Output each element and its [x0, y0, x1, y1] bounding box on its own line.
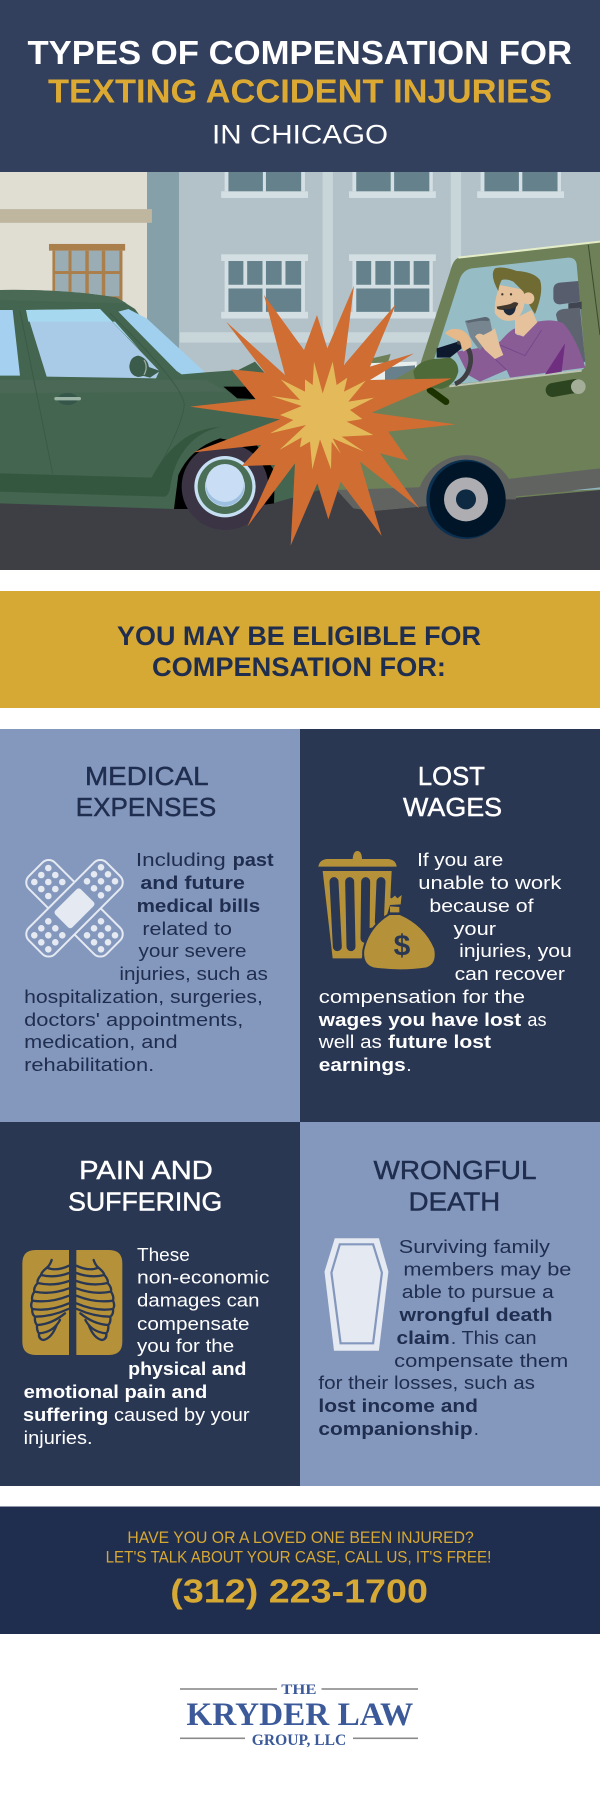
panel: lost wages: [300, 729, 600, 1122]
body text: lost wages: earnings: [319, 1054, 406, 1075]
body text: medical expenses: related to: [142, 918, 232, 939]
body text: pain and suffering: [23, 1244, 269, 1448]
body text: wrongful death: able to pursue a: [402, 1281, 555, 1302]
title line 1: TYPES OF COMPENSATION FOR: [28, 34, 572, 71]
body text: wrongful death: [318, 1236, 571, 1439]
body text: lost wages: injuries, you: [459, 940, 572, 961]
body text: pain and suffering: damages can: [137, 1290, 260, 1311]
body text: lost wages: your: [454, 918, 496, 939]
icon: rib cage: [22, 1250, 122, 1355]
heading: lost wages: WAGES: [403, 792, 502, 822]
call to action text: [106, 1529, 491, 1566]
body text: pain and suffering: caused by your: [114, 1404, 250, 1425]
heading: wrongful death: DEATH: [409, 1187, 500, 1217]
body text: lost wages: If you are: [417, 849, 503, 870]
body text: lost wages: .: [406, 1054, 412, 1075]
body text: wrongful death: .: [474, 1418, 479, 1439]
panel: pain and suffering: [0, 1122, 300, 1486]
logo: The Kryder Law Group, LLC: THE: [281, 1682, 316, 1698]
body text: pain and suffering: suffering: [23, 1404, 108, 1425]
body text: pain and suffering: compensate: [137, 1313, 250, 1334]
heading: lost wages: LOST: [418, 761, 485, 791]
body text: lost wages: unable to work: [418, 872, 562, 893]
body text: medical expenses: medication, and: [24, 1031, 178, 1052]
body text: pain and suffering: non-economic: [137, 1266, 269, 1288]
body text: medical expenses: medical bills: [137, 895, 260, 916]
body text: medical expenses: [24, 849, 274, 1075]
heading: medical expenses: EXPENSES: [76, 792, 216, 822]
banner heading: [117, 621, 481, 682]
body text: medical expenses: and future: [140, 872, 245, 893]
phone number: (312) 223-1700: [170, 1573, 428, 1610]
body text: pain and suffering: emotional pain and: [24, 1381, 207, 1402]
header panel: [0, 0, 600, 172]
body text: pain and suffering: you for the: [137, 1335, 234, 1356]
body text: lost wages: can recover: [455, 963, 565, 984]
logo: The Kryder Law Group, LLC: [180, 1682, 418, 1749]
body text: wrongful death: for their losses, such as: [318, 1372, 535, 1393]
body text: medical expenses: Including: [136, 849, 226, 870]
body text: medical expenses: injuries, such as: [119, 963, 268, 984]
banner heading: YOU MAY BE ELIGIBLE FOR: [117, 621, 481, 651]
body text: wrongful death: compensate them: [394, 1350, 568, 1371]
body text: lost wages: as: [527, 1009, 546, 1030]
seat: [553, 281, 585, 368]
body text: wrongful death: claim: [396, 1327, 450, 1348]
body text: wrongful death: companionship: [318, 1418, 473, 1439]
icon: coffin: [324, 1238, 388, 1351]
body text: lost wages: compensation for the: [319, 986, 525, 1007]
heading: medical expenses: MEDICAL: [85, 761, 209, 791]
logo: The Kryder Law Group, LLC: KRYDER LAW: [186, 1697, 413, 1733]
body text: pain and suffering: physical and: [128, 1358, 246, 1379]
illustration: car crash: [0, 172, 600, 570]
panel: wrongful death: [300, 1122, 600, 1486]
body text: wrongful death: members may be: [403, 1258, 571, 1280]
title line 2: TEXTING ACCIDENT INJURIES: [48, 73, 552, 110]
body text: lost wages: because of: [429, 895, 534, 916]
dollar sign: $: [394, 930, 411, 963]
body text: medical expenses: rehabilitation.: [24, 1054, 154, 1075]
body text: medical expenses: your severe: [138, 940, 246, 961]
body text: pain and suffering: These: [137, 1244, 190, 1265]
driver: [457, 267, 585, 382]
left green car: [0, 290, 320, 530]
body text: lost wages: future lost: [388, 1031, 491, 1052]
body text: medical expenses: hospitalization, surgeries,: [24, 986, 263, 1007]
heading: wrongful death: [374, 1155, 536, 1217]
body text: wrongful death: . This can: [451, 1327, 536, 1348]
banner heading: COMPENSATION FOR:: [152, 652, 446, 682]
buildings background: [0, 172, 600, 375]
bumper strip and wheel: [337, 455, 600, 539]
title line 3: IN CHICAGO: [212, 120, 388, 150]
call to action text: HAVE YOU OR A LOVED ONE BEEN INJURED?: [127, 1529, 474, 1547]
body text: medical expenses: doctors' appointments,: [24, 1009, 243, 1030]
gold banner: [0, 591, 600, 708]
call to action text: LET'S TALK ABOUT YOUR CASE, CALL US, IT'S FREE!: [106, 1548, 491, 1566]
logo: The Kryder Law Group, LLC: GROUP, LLC: [252, 1732, 346, 1749]
side mirror: [413, 358, 458, 402]
heading: pain and suffering: PAIN AND: [79, 1155, 213, 1185]
behind-hood details: [343, 354, 417, 385]
panel: medical expenses: [0, 729, 300, 1122]
road: [0, 488, 600, 570]
door handle: [553, 379, 586, 394]
icon: bandages: [23, 856, 126, 960]
explosion: [190, 286, 456, 546]
icon: trash can and money bag: [318, 851, 436, 970]
heading: lost wages: [403, 761, 502, 822]
body text: medical expenses: past: [233, 849, 274, 870]
body text: pain and suffering: injuries.: [24, 1427, 93, 1448]
body text: lost wages: wages you have lost: [318, 1009, 521, 1030]
body text: wrongful death: Surviving family: [399, 1236, 551, 1257]
steering wheel: [437, 329, 472, 384]
body text: wrongful death: lost income and: [318, 1395, 478, 1416]
heading: pain and suffering: [68, 1155, 222, 1217]
right olive car: [337, 241, 600, 539]
heading: wrongful death: WRONGFUL: [374, 1155, 536, 1185]
body text: lost wages: [318, 849, 572, 1075]
heading: medical expenses: [76, 761, 216, 822]
body text: lost wages: well as: [318, 1031, 382, 1052]
heading: pain and suffering: SUFFERING: [68, 1187, 222, 1217]
call to action panel: [0, 1506, 600, 1634]
cab, window and driver: [413, 242, 600, 402]
body text: wrongful death: wrongful death: [398, 1304, 553, 1325]
